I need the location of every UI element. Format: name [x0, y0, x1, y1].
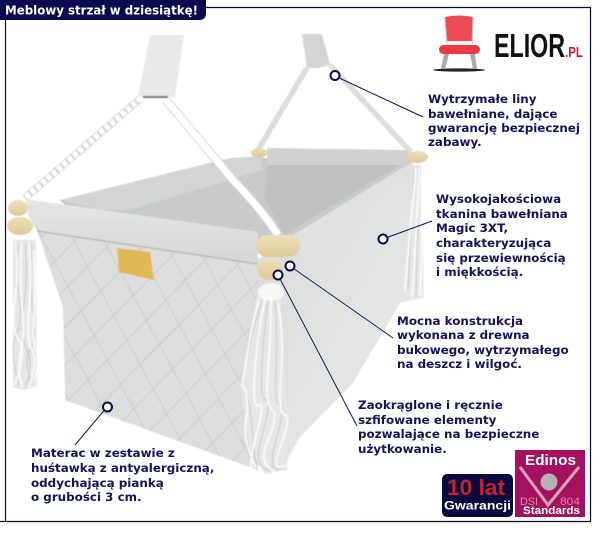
back ropes	[258, 65, 411, 152]
marker	[274, 270, 282, 280]
text block: oddychającą pianką	[31, 476, 164, 490]
badge: Edinos standards: Standards	[523, 505, 580, 517]
leader line	[383, 221, 432, 239]
text block: na deszcz i wilgoć.	[397, 357, 522, 371]
callout: rounded elements	[274, 270, 539, 456]
back strap	[302, 34, 330, 68]
text block: Zaokrąglone i ręcznie	[358, 398, 503, 412]
logo: ELIOR.PL	[433, 16, 583, 72]
badge: 10 lat warranty	[442, 474, 513, 517]
text block: zabawy.	[428, 135, 482, 149]
tassel: back right	[402, 165, 424, 299]
right side panel	[250, 170, 422, 467]
wooden pegs	[7, 148, 428, 280]
text block: użytkowanie.	[358, 442, 447, 456]
text block: Magic 3XT,	[436, 221, 508, 235]
front strap	[138, 35, 184, 97]
logo: ELIOR.PL: ELIOR	[494, 27, 565, 64]
text block: Materac w zestawie z	[31, 446, 175, 460]
callout: Magic 3XT fabric	[378, 192, 568, 279]
text block: wykonana z drewna	[397, 328, 530, 342]
marker	[103, 402, 112, 412]
icon: red chair	[433, 16, 485, 72]
badge: 10 lat warranty: Gwarancji	[444, 498, 511, 512]
badge: 10 lat warranty: 10 lat	[447, 475, 506, 500]
callout: mattress	[31, 402, 214, 504]
leader line	[278, 275, 357, 426]
text block: Wysokojakościowa	[436, 192, 561, 206]
right side bar	[290, 163, 420, 252]
text block: bawełniane, dające	[428, 107, 558, 121]
interior of the swing	[60, 148, 413, 240]
leader line	[335, 76, 423, 117]
marker	[378, 234, 388, 244]
text block: huśtawką z antyalergiczną,	[31, 461, 214, 475]
leader line	[75, 407, 107, 445]
leader line	[290, 266, 393, 338]
badge: Edinos standards: 804	[560, 496, 580, 508]
marker	[330, 71, 340, 80]
tassel: front right	[240, 283, 288, 474]
text block: tkanina bawełniana	[436, 207, 568, 221]
text block: charakteryzująca	[436, 236, 551, 250]
text block: się przewiewnością	[436, 251, 566, 265]
text block: gwarancję bezpiecznej	[428, 121, 580, 135]
text block: szfifowane elementy	[358, 413, 497, 427]
label patch	[117, 248, 154, 280]
title banner	[0, 0, 206, 20]
callout: beech construction	[286, 262, 569, 371]
logo: ELIOR.PL: .PL	[565, 44, 583, 61]
front ropes	[25, 98, 278, 235]
text block: i miękkością.	[436, 265, 523, 279]
marker	[286, 262, 294, 270]
front padded bar	[27, 200, 258, 264]
text block: bukowego, wytrzymałego	[397, 343, 569, 357]
text block: o grubości 3 cm.	[31, 490, 142, 504]
title banner: Meblowy strzał w dziesiątkę!	[5, 4, 198, 18]
text block: Mocna konstrukcja	[397, 314, 523, 328]
tassel: left	[13, 240, 38, 390]
text block: Wytrzymałe liny	[428, 92, 537, 106]
text block: pozwalające na bezpieczne	[358, 427, 539, 441]
badge: Edinos standards: DSI	[520, 496, 538, 508]
callout: cotton ropes	[330, 71, 580, 149]
photo: baby swing	[7, 34, 428, 474]
badge: Edinos standards	[515, 450, 585, 517]
front quilted panel	[37, 230, 258, 470]
badge: Edinos standards: Edinos	[525, 452, 576, 469]
